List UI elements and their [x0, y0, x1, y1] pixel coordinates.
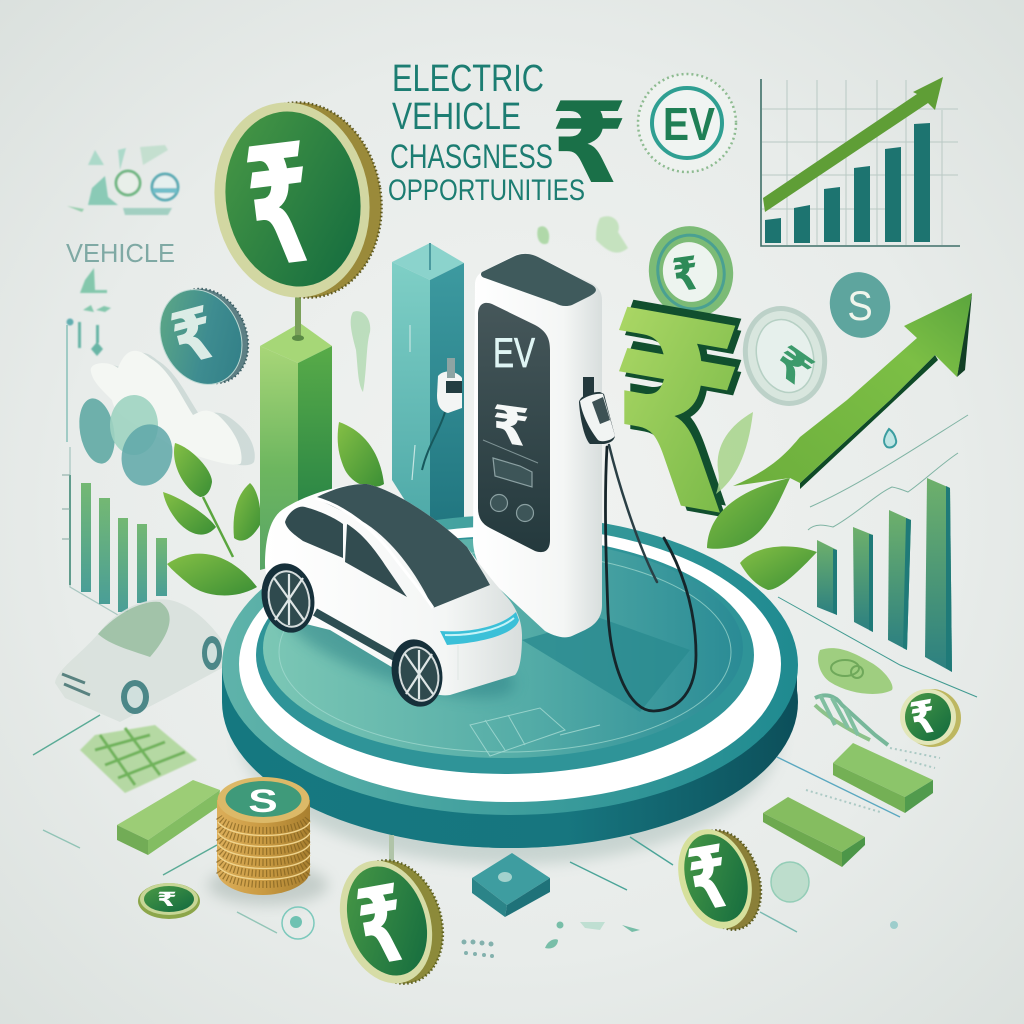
bottom rupee coin: ₹: [349, 863, 414, 988]
charger shadow: [522, 618, 690, 712]
coin face: [213, 102, 373, 296]
teal column: [392, 243, 464, 540]
faded paint mark: [351, 311, 370, 392]
green block right upper: [833, 743, 933, 813]
icon: teal rupee coin left: [145, 276, 263, 398]
icon: small rupee coin: ₹: [157, 889, 177, 911]
car shadow: [276, 582, 524, 718]
icon: teal S coin: [822, 265, 898, 345]
title line: opportunities: OPPORTUNITIES: [388, 174, 585, 207]
center leaf behind car: [338, 422, 384, 487]
icon: swirl: [282, 907, 314, 939]
faded icons: top left car sketch: [67, 145, 178, 215]
charging cable: [605, 445, 696, 711]
decorative cloud and hills: [75, 351, 255, 491]
teal block: [472, 853, 550, 917]
title line: vehicle: VEHICLE: [392, 96, 521, 138]
icon: right rupee coin: [900, 689, 961, 747]
platform: [222, 515, 798, 865]
icon: teal rupee coin left: ₹: [163, 291, 224, 380]
screen controls: [490, 458, 534, 522]
rear wheel: [255, 558, 321, 638]
title block: [388, 58, 585, 207]
faded green bill: [818, 648, 893, 694]
faded car: [55, 599, 222, 722]
coin stack: [208, 777, 328, 905]
electric car: [255, 484, 524, 718]
faded striped bill: [815, 695, 888, 745]
bottom right rupee coin: [666, 820, 773, 939]
coin face rim: [201, 91, 383, 309]
platform base: [222, 556, 798, 848]
white ring: [239, 526, 781, 802]
leaf at arrow base: [707, 478, 790, 549]
car headlight: [440, 612, 519, 645]
right leaf: [740, 546, 817, 590]
faint dotted marks right: [806, 748, 940, 812]
green column: [260, 323, 332, 570]
car side windows: [285, 507, 343, 558]
icon: EV badge: [638, 74, 736, 172]
icon: teal S coin: S: [847, 283, 873, 329]
screen rupee: ₹: [492, 395, 530, 458]
big rupee symbol: ₹: [615, 263, 751, 577]
specks bottom: [545, 921, 898, 949]
big rupee coin on pole: [201, 91, 395, 570]
faded label: vehicle: VEHICLE: [66, 238, 175, 268]
icon: small rupee coin: [138, 883, 200, 919]
pale leaf: [716, 412, 753, 494]
chart: left green bars: [62, 475, 167, 612]
faded marks below vehicle label: [66, 268, 111, 356]
chart: top right growth bars with arrow: [761, 77, 960, 246]
icon: ring rupee coin: ₹: [669, 247, 702, 302]
icon: faded rupee coin: ₹: [764, 337, 821, 397]
front wheel: [385, 635, 449, 711]
icon: ring rupee coin: [640, 218, 742, 326]
charger top cap: [481, 254, 596, 306]
charging plug: [579, 377, 615, 444]
icon: water drop: [884, 429, 896, 447]
rupee symbol on coin: ₹: [237, 112, 323, 302]
lines lower left: [33, 715, 277, 933]
title line: electric: ELECTRIC: [392, 58, 544, 100]
platform rim: [222, 515, 798, 815]
screen EV label: EV: [493, 329, 535, 376]
bottom right rupee coin: ₹: [681, 829, 736, 930]
icon: right rupee coin: ₹: [907, 691, 940, 745]
bottom rupee coin: [325, 835, 458, 996]
icon: title rupee symbol: ₹: [550, 81, 628, 206]
platform surface: [263, 538, 743, 758]
platform inner band: [256, 536, 754, 774]
faded coin centre marks: [537, 216, 628, 253]
big rupee symbol: ₹: [615, 251, 751, 565]
faded circuit bills left: [80, 725, 197, 793]
car body: [265, 484, 522, 695]
charger screen: [478, 303, 550, 552]
coin stack: S: [248, 784, 278, 820]
coin edge: [211, 91, 395, 309]
car roof and windshield: [315, 484, 490, 608]
wall plug on column: [437, 372, 462, 413]
green block left: [117, 780, 220, 855]
pole: [295, 292, 301, 340]
big rupee symbol: ₹: [609, 258, 745, 572]
dots mini text: [462, 940, 494, 958]
charger station: [473, 253, 602, 637]
leaves: left sprig: [163, 443, 261, 595]
icon: faded rupee coin: [735, 300, 835, 412]
faded left axis: [67, 325, 118, 615]
lines lower right: [570, 757, 900, 932]
faded circle stamp: [771, 862, 809, 902]
green block right lower: [763, 797, 865, 867]
chart: right trend bars: [778, 415, 977, 697]
big rising arrow: [733, 293, 972, 489]
icon: EV badge: EV: [663, 98, 715, 150]
platform sketch grid: [470, 708, 600, 756]
charger body: [473, 253, 602, 637]
title line: chasgness: CHASGNESS: [390, 138, 553, 176]
